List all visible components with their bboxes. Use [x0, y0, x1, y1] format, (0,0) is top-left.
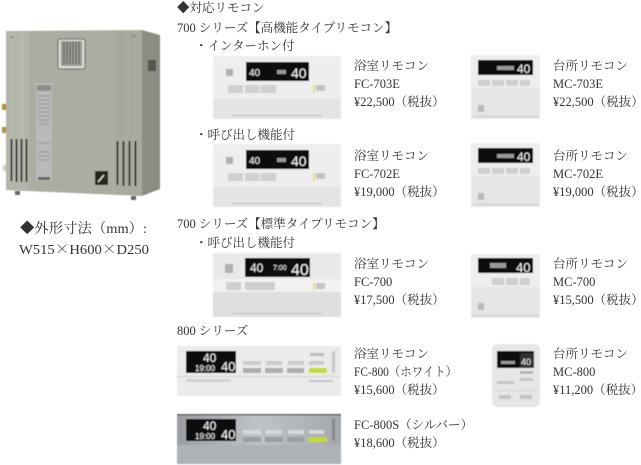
label: FC-702E: FC-702E	[354, 167, 400, 181]
remote: MC-700: 40	[516, 260, 530, 275]
label: FC-703E	[354, 59, 445, 109]
remote: MC-700	[471, 254, 540, 318]
label: MC-702E	[553, 148, 641, 199]
label: MC-703E: ¥22,500（税抜）	[553, 94, 641, 109]
remote: FC-800 white: 40	[203, 351, 217, 365]
remote: FC-800 white: 40	[221, 359, 235, 374]
subheading: call function: ・呼び出し機能付	[195, 127, 296, 142]
dimensions text	[19, 220, 149, 259]
label: FC-800S: FC-800S（シルバー）	[354, 418, 473, 432]
remote: MC-800: 40	[521, 357, 531, 367]
heading: 700 series high-function: 700 シリーズ【高機能タイプリモコン】	[177, 20, 397, 35]
label: MC-800: MC-800	[553, 365, 595, 379]
heading: compatible remotes: ◆対応リモコン	[177, 0, 265, 15]
remote: FC-700: 7:00	[273, 265, 287, 272]
dimensions text: W515×H600×D250	[19, 239, 149, 259]
label: MC-700: MC-700	[553, 275, 595, 289]
label: FC-800	[354, 347, 457, 397]
remote: FC-800S silver: 40	[203, 419, 217, 433]
label: MC-800: 台所リモコン	[553, 346, 628, 361]
remote: FC-800 white	[177, 346, 341, 396]
subheading: call function standard: ・呼び出し機能付	[195, 235, 296, 250]
remote: FC-703E	[213, 56, 341, 119]
remote: FC-700	[213, 253, 341, 317]
label: FC-700	[354, 257, 445, 307]
remote: MC-800	[492, 344, 540, 407]
label: MC-700: 台所リモコン	[553, 256, 628, 271]
label: FC-800S	[354, 418, 473, 450]
label: FC-800: FC-800（ホワイト）	[354, 365, 457, 379]
label: FC-703E: FC-703E	[354, 77, 400, 91]
remote: MC-703E	[471, 55, 540, 119]
label: FC-800: ¥15,600（税抜）	[354, 382, 445, 397]
label: FC-703E: 浴室リモコン	[354, 59, 429, 73]
remote: FC-702E	[213, 144, 341, 207]
remote: FC-800S silver	[177, 414, 341, 464]
label: MC-702E: 台所リモコン	[553, 148, 628, 163]
label: MC-700: ¥15,500（税抜）	[553, 292, 641, 307]
label: MC-703E: 台所リモコン	[553, 58, 628, 73]
subheading: intercom: ・インターホン付	[195, 38, 295, 53]
remote: MC-703E: 40	[517, 62, 531, 76]
label: MC-702E: ¥19,000（税抜）	[553, 184, 641, 199]
label: FC-703E: ¥22,500（税抜）	[354, 94, 445, 109]
water heater unit	[2, 30, 160, 200]
remote: FC-800S silver: 19:00	[195, 432, 216, 441]
heading: 700 series standard: 700 シリーズ【標準タイプリモコン】	[177, 216, 385, 231]
remote: FC-800S silver: 40	[221, 427, 235, 442]
label: MC-700	[553, 256, 641, 307]
remote: FC-703E: 40	[249, 68, 261, 79]
remote: FC-800 white: 19:00	[195, 364, 216, 373]
label: FC-700: FC-700	[354, 275, 392, 289]
label: FC-700: ¥17,500（税抜）	[354, 292, 445, 307]
remote: MC-702E	[471, 143, 540, 207]
label: FC-702E	[354, 149, 445, 199]
label: MC-702E: MC-702E	[553, 167, 603, 181]
remote: FC-700: 40	[291, 262, 309, 279]
label: FC-800S: ¥18,600（税抜）	[354, 435, 445, 450]
remote: FC-702E: 40	[291, 153, 307, 169]
remote: FC-700: 40	[250, 261, 264, 275]
label: FC-702E: ¥19,000（税抜）	[354, 184, 445, 199]
label: MC-703E	[553, 58, 641, 109]
dimensions text: ◆外形寸法（mm）:	[20, 220, 147, 237]
heading: 800 series: 800 シリーズ	[177, 324, 248, 338]
label: MC-800	[553, 346, 641, 397]
label: FC-702E: 浴室リモコン	[354, 149, 429, 163]
label: MC-703E: MC-703E	[553, 77, 603, 91]
label: FC-800: 浴室リモコン	[354, 347, 429, 361]
label: FC-700: 浴室リモコン	[354, 257, 429, 271]
remote: MC-702E: 40	[517, 150, 531, 164]
remote: FC-702E: 40	[249, 156, 261, 167]
remote: FC-703E: 40	[291, 65, 307, 81]
label: MC-800: ¥11,200（税抜）	[553, 382, 641, 397]
